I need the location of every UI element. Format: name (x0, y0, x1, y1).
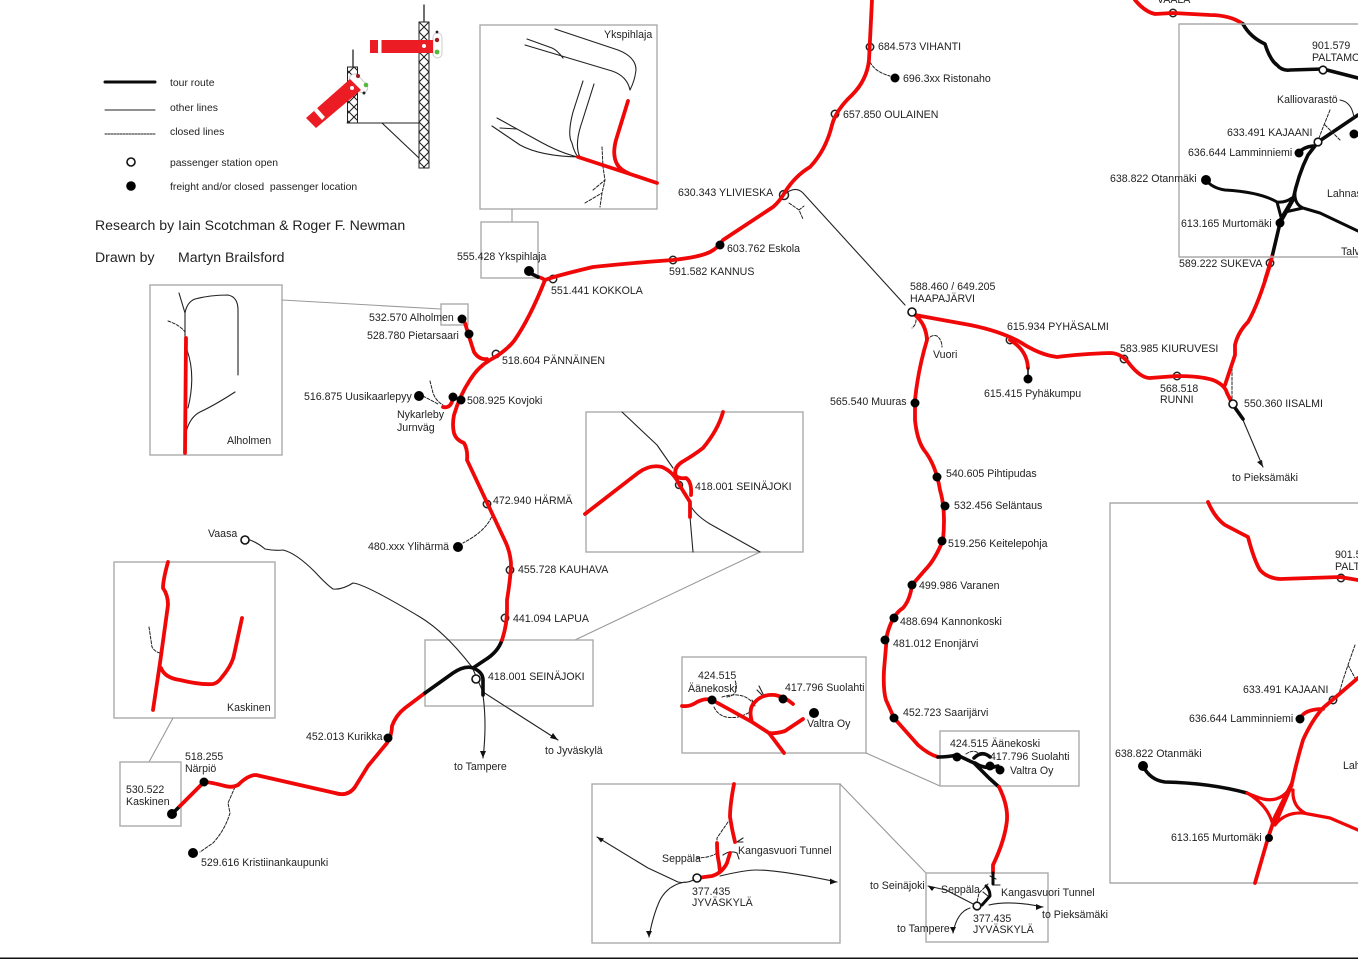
inset: Kajaani lower: 638.822 Otanmäki (1115, 748, 1202, 760)
station labels: 508.925 Kovjoki (467, 395, 542, 407)
station labels: 452.013 Kurikka (306, 731, 383, 743)
legend: passenger station open: passenger station open (170, 158, 278, 169)
inset: Alholmen (150, 285, 468, 455)
station labels: 518.604 PÄNNÄINEN (502, 355, 605, 367)
small box: Äänekoski area (940, 731, 1079, 786)
station labels: 583.985 KIURUVESI (1120, 343, 1218, 355)
station labels: 684.573 VIHANTI (878, 41, 961, 53)
station labels: 480.xxx Ylihärmä (368, 541, 449, 553)
inset: Kajaani lower: 636.644 Lamminniemi (1189, 713, 1293, 725)
other lines and closed lines (200, 62, 1263, 852)
station labels: 528.780 Pietarsaari (367, 330, 459, 342)
station labels: 441.094 LAPUA (513, 613, 590, 625)
open stations under track (483, 43, 874, 622)
station labels: 603.762 Eskola (727, 243, 800, 255)
inset: Äänekoski: Äänekoski (688, 683, 737, 695)
inset: Jyväskylä: 377.435 (692, 886, 730, 898)
small box: Seinäjoki area (425, 640, 593, 706)
station labels: 518.255 (185, 751, 223, 763)
tour route track (172, 0, 872, 814)
station labels: 532.570 Alholmen (369, 312, 454, 324)
inset: Alholmen: Alholmen (227, 435, 271, 447)
icon: semaphore signals (306, 5, 442, 168)
inset: Äänekoski (682, 657, 940, 786)
station labels: 615.415 Pyhäkumpu (984, 388, 1081, 400)
station labels: to Jyväskylä (545, 745, 603, 757)
legend: closed lines (105, 127, 224, 138)
inset: Jyväskylä: Kangasvuori Tunnel (738, 845, 832, 857)
station labels: 481.012 Enonjärvi (893, 638, 978, 650)
station labels (830, 281, 1323, 936)
station labels: Valtra Oy (1010, 765, 1054, 777)
station labels: 424.515 Äänekoski (950, 738, 1040, 750)
stations (880, 66, 1358, 910)
inset: Seinäjoki: 418.001 SEINÄJOKI (695, 481, 792, 493)
inset: Kaskinen: Kaskinen (227, 702, 271, 714)
station labels: Nykarleby (397, 409, 445, 421)
station labels: 532.456 Seläntaus (954, 500, 1042, 512)
inset: Kajaani upper: 901.579 (1312, 40, 1350, 52)
inset: Jyväskylä: JYVÄSKYLÄ (692, 897, 754, 909)
station labels: 529.616 Kristiinankaupunki (201, 857, 328, 869)
inset: Kajaani upper: Kalliovarastö (1277, 94, 1338, 106)
station labels: 551.441 KOKKOLA (551, 285, 644, 297)
station labels: Seppäla (941, 884, 980, 896)
station labels: JYVÄSKYLÄ (973, 924, 1035, 936)
legend: closed lines: closed lines (170, 127, 224, 138)
inset: Jyväskylä: Seppäla (662, 853, 701, 865)
station labels: to Tampere (897, 923, 950, 935)
credits (95, 217, 405, 265)
station labels: 455.728 KAUHAVA (518, 564, 609, 576)
inset: Jyväskylä (592, 784, 926, 943)
stations (167, 74, 900, 858)
station labels: 588.460 / 649.205 (910, 281, 996, 293)
station labels: 417.796 Suolahti (990, 751, 1070, 763)
inset: Äänekoski: 417.796 Suolahti (785, 682, 865, 694)
central and eastern route (830, 0, 1358, 936)
station labels: Jurnväg (397, 422, 435, 434)
legend: tour route: tour route (170, 78, 215, 89)
station labels: 516.875 Uusikaarlepyy (304, 391, 412, 403)
legend (105, 78, 357, 193)
station labels: 555.428 Ykspihlaja (457, 251, 546, 263)
small box: Jyväskylä area (926, 873, 1048, 942)
station labels: 696.3xx Ristonaho (903, 73, 991, 85)
credits: Research by Iain Scotchman & Roger F. Newman (95, 217, 405, 233)
station labels: to Seinäjoki (870, 880, 925, 892)
station labels: 519.256 Keitelepohja (948, 538, 1048, 550)
station labels: Kaskinen (126, 796, 170, 808)
station labels: to Pieksämäki (1232, 472, 1298, 484)
inset: Äänekoski: Valtra Oy (807, 718, 851, 730)
station labels: 615.934 PYHÄSALMI (1007, 321, 1109, 333)
inset: Kajaani lower: 613.165 Murtomäki (1171, 832, 1262, 844)
station labels: Närpiö (185, 763, 216, 775)
station labels: 488.694 Kannonkoski (900, 616, 1002, 628)
station labels: 565.540 Muuras (830, 396, 907, 408)
station labels: 377.435 (973, 913, 1011, 925)
inset: Kajaani upper (1110, 0, 1358, 270)
station labels: Vaasa (208, 528, 237, 540)
branch details (912, 320, 1263, 933)
station labels: 568.518 (1160, 383, 1198, 395)
open stations under track (1006, 9, 1274, 380)
legend: other lines: other lines (170, 103, 218, 114)
legend: tour route (105, 78, 215, 89)
station labels: 591.582 KANNUS (669, 266, 754, 278)
inset: Kajaani upper: 589.222 SUKEVA (1179, 258, 1263, 270)
station labels: to Tampere (454, 761, 507, 773)
inset: Kajaani lower: 633.491 KAJAANI (1243, 684, 1328, 696)
station labels: 499.986 Varanen (919, 580, 1000, 592)
inset: Ykspihlaja: Ykspihlaja (604, 29, 652, 41)
credits: Drawn by (95, 249, 155, 265)
station labels: Vuori (933, 349, 957, 361)
station labels (126, 41, 991, 869)
station labels: 452.723 Saarijärvi (903, 707, 988, 719)
inset: Äänekoski: 424.515 (698, 670, 736, 682)
tour route track (884, 0, 1358, 905)
legend: other lines (105, 103, 218, 114)
station labels: Kangasvuori Tunnel (1001, 887, 1095, 899)
inset: Ykspihlaja (480, 25, 657, 278)
legend: freight location: freight and/or closed passenger location (170, 182, 357, 193)
station labels: 550.360 IISALMI (1244, 398, 1323, 410)
inset: Kajaani upper: 638.822 Otanmäki (1110, 173, 1197, 185)
inset: Kajaani upper: 636.644 Lamminniemi (1188, 147, 1292, 159)
station labels: 418.001 SEINÄJOKI (488, 671, 585, 683)
inset: Seinäjoki (575, 412, 803, 640)
station labels: HAAPAJÄRVI (910, 293, 975, 305)
station labels: 630.343 YLIVIESKA (678, 187, 774, 199)
station labels: 657.850 OULAINEN (843, 109, 938, 121)
station labels: RUNNI (1160, 394, 1194, 406)
station labels: to Pieksämäki (1042, 909, 1108, 921)
inset: Kajaani upper: 633.491 KAJAANI (1227, 127, 1312, 139)
station labels: 472.940 HÄRMÄ (493, 495, 573, 507)
credits: Martyn Brailsford (178, 249, 285, 265)
inset: Kajaani upper: 613.165 Murtomäki (1181, 218, 1272, 230)
inset: Kaskinen (114, 562, 275, 826)
western route (126, 0, 1263, 869)
inset: Kajaani lower (1110, 502, 1358, 883)
station labels: 540.605 Pihtipudas (946, 468, 1037, 480)
station labels: 530.522 (126, 784, 164, 796)
